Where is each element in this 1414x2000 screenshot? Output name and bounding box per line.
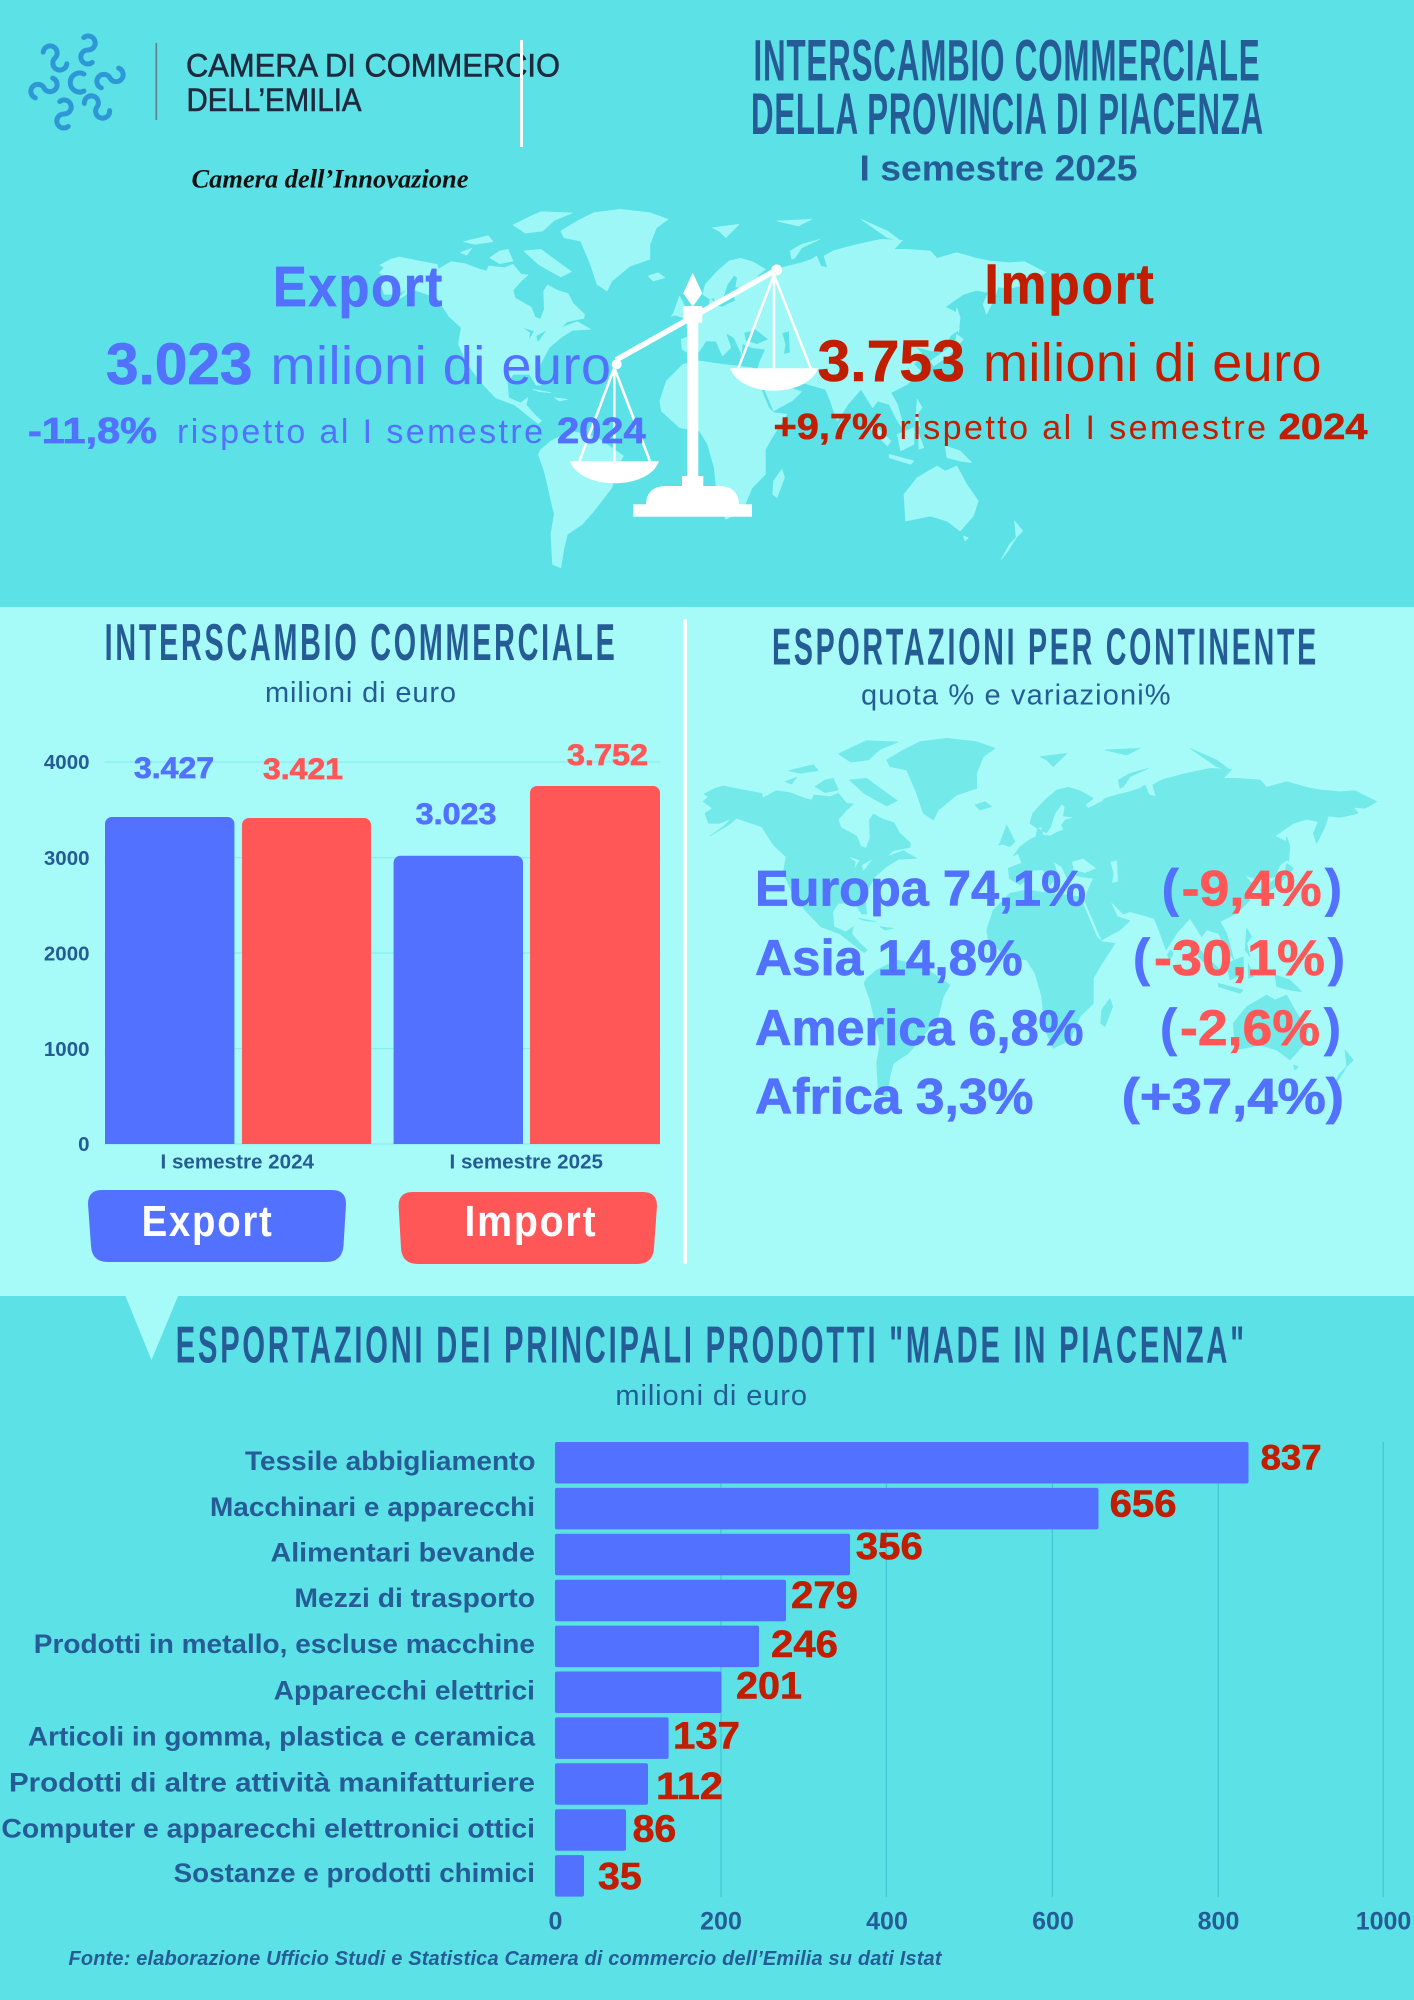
export summary: rispetto al I semestre bbox=[177, 413, 543, 451]
heading: interscambio: INTERSCAMBIO COMMERCIALE bbox=[105, 614, 618, 672]
row: Europa: -9,4% bbox=[1182, 861, 1322, 917]
panel divider bbox=[684, 619, 687, 1264]
world map: hero background bbox=[379, 209, 1046, 568]
export summary: 2024 bbox=[557, 410, 646, 451]
row: Asia: Asia 14,8% bbox=[755, 930, 1023, 986]
export summary: -11,8% bbox=[28, 410, 157, 451]
import summary: rispetto al I semestre bbox=[900, 409, 1266, 447]
bar values: 837 bbox=[1261, 1439, 1322, 1478]
import summary: Import bbox=[984, 252, 1156, 316]
bar values bbox=[598, 1439, 1322, 1898]
panel: trade balance column chart bbox=[44, 614, 660, 1264]
product labels: Mezzi di trasporto bbox=[294, 1583, 535, 1613]
source note: Fonte: elaborazione Ufficio Studi e Statistica Camera di commercio dell’Emilia su dati Istat bbox=[68, 1948, 943, 1970]
x axis labels bbox=[549, 1908, 1411, 1936]
y axis labels: 1000 bbox=[44, 1038, 90, 1061]
row: Europa: ) bbox=[1325, 860, 1342, 918]
x axis labels: 200 bbox=[700, 1908, 742, 1936]
bar values: 137 bbox=[673, 1716, 740, 1758]
y axis labels: 4000 bbox=[44, 751, 90, 774]
product labels: Articoli in gomma, plastica e ceramica bbox=[28, 1721, 536, 1751]
import summary bbox=[774, 252, 1368, 447]
bar value labels bbox=[134, 739, 648, 831]
world map: continents background bbox=[703, 738, 1377, 1097]
export summary: 3.023 bbox=[106, 332, 252, 397]
bar values: 112 bbox=[656, 1766, 723, 1808]
subheading: milioni di euro bbox=[615, 1380, 807, 1412]
row: Europa: ( bbox=[1162, 860, 1179, 918]
product labels: Tessile abbigliamento bbox=[245, 1446, 536, 1476]
y axis labels: 2000 bbox=[44, 942, 90, 966]
bar values: 279 bbox=[791, 1575, 858, 1617]
row: America bbox=[755, 999, 1341, 1057]
export summary: Export bbox=[273, 255, 444, 319]
row: Asia bbox=[755, 929, 1345, 987]
product labels: Computer e apparecchi elettronici ottici bbox=[1, 1813, 535, 1843]
row: Europa: Europa 74,1% bbox=[755, 861, 1086, 917]
import summary: 2024 bbox=[1279, 406, 1368, 447]
white header line bbox=[520, 40, 523, 147]
bar values: 356 bbox=[856, 1526, 923, 1568]
logo name: DELL’EMILIA bbox=[186, 82, 362, 118]
bar values: 86 bbox=[633, 1808, 676, 1850]
x axis labels: 800 bbox=[1198, 1908, 1239, 1936]
logo separator bbox=[156, 43, 157, 120]
x axis labels: 600 bbox=[1032, 1908, 1074, 1936]
row: America: -2,6% bbox=[1180, 1000, 1320, 1056]
row: Africa: Africa 3,3% bbox=[755, 1068, 1034, 1124]
bar values: 656 bbox=[1110, 1484, 1177, 1526]
bar value labels: 3.023 bbox=[416, 798, 496, 831]
x axis labels: 1000 bbox=[1356, 1908, 1411, 1936]
icon: balance scale bbox=[570, 264, 818, 517]
bar values: 246 bbox=[771, 1624, 838, 1666]
icon: logo swirls bbox=[28, 35, 126, 129]
product labels: Sostanze e prodotti chimici bbox=[174, 1858, 535, 1888]
y axis labels: 0 bbox=[78, 1133, 90, 1156]
row: Asia: ) bbox=[1328, 929, 1345, 987]
bar value labels: 3.421 bbox=[263, 753, 343, 786]
row: America: America 6,8% bbox=[755, 1000, 1084, 1056]
title bbox=[751, 28, 1264, 188]
bar values: 201 bbox=[736, 1666, 802, 1708]
horizontal bars bbox=[555, 1442, 1248, 1897]
product labels: Macchinari e apparecchi bbox=[210, 1492, 535, 1522]
import summary: milioni di euro bbox=[983, 333, 1322, 393]
panel: main products bbox=[1, 1316, 1411, 1936]
panel: middle band bbox=[0, 607, 1414, 1360]
product labels: Prodotti di altre attività manifatturiere bbox=[9, 1767, 535, 1797]
legend: export: Export bbox=[142, 1197, 274, 1246]
subheading: quota % e variazioni% bbox=[861, 680, 1171, 712]
row: Africa bbox=[755, 1068, 1344, 1124]
bar value labels: 3.427 bbox=[134, 752, 214, 785]
y axis labels: 3000 bbox=[44, 847, 90, 870]
subheading: milioni di euro bbox=[265, 677, 456, 709]
export summary bbox=[28, 255, 646, 451]
x axis labels: 0 bbox=[549, 1908, 562, 1936]
legend: import: Import bbox=[464, 1197, 597, 1246]
legend: import bbox=[399, 1192, 657, 1264]
row: Asia: ( bbox=[1133, 929, 1151, 987]
x axis labels: 400 bbox=[866, 1908, 908, 1936]
bar values: 35 bbox=[598, 1856, 642, 1898]
panel: exports by continent bbox=[755, 619, 1345, 1124]
x axis labels: I semestre 2024 bbox=[160, 1152, 315, 1174]
row: Africa: (+37,4%) bbox=[1122, 1068, 1344, 1124]
legend: export bbox=[88, 1190, 346, 1262]
product labels: Prodotti in metallo, escluse macchine bbox=[34, 1629, 535, 1659]
row: Europa bbox=[755, 860, 1342, 918]
row: America: ) bbox=[1324, 999, 1341, 1057]
logo name bbox=[186, 48, 560, 118]
product labels bbox=[1, 1446, 536, 1888]
export summary: milioni di euro bbox=[270, 336, 611, 396]
row: America: ( bbox=[1160, 999, 1178, 1057]
x axis labels bbox=[160, 1152, 603, 1174]
bars bbox=[105, 786, 660, 1144]
chart gridlines bbox=[721, 1442, 1383, 1897]
chart gridlines bbox=[105, 762, 661, 1144]
product labels: Apparecchi elettrici bbox=[274, 1675, 535, 1705]
x axis labels: I semestre 2025 bbox=[450, 1152, 603, 1174]
import summary: +9,7% bbox=[774, 406, 888, 447]
product labels: Alimentari bevande bbox=[270, 1538, 535, 1568]
import summary: 3.753 bbox=[818, 329, 965, 394]
logo name: CAMERA DI COMMERCIO bbox=[186, 48, 560, 84]
title: I semestre 2025 bbox=[860, 148, 1138, 188]
logo: Camera di Commercio dell'Emilia bbox=[28, 35, 560, 129]
tagline: Camera dell’Innovazione bbox=[192, 164, 468, 194]
row: Asia: -30,1% bbox=[1154, 930, 1325, 986]
bar value labels: 3.752 bbox=[567, 739, 648, 772]
y axis labels bbox=[44, 751, 90, 1156]
